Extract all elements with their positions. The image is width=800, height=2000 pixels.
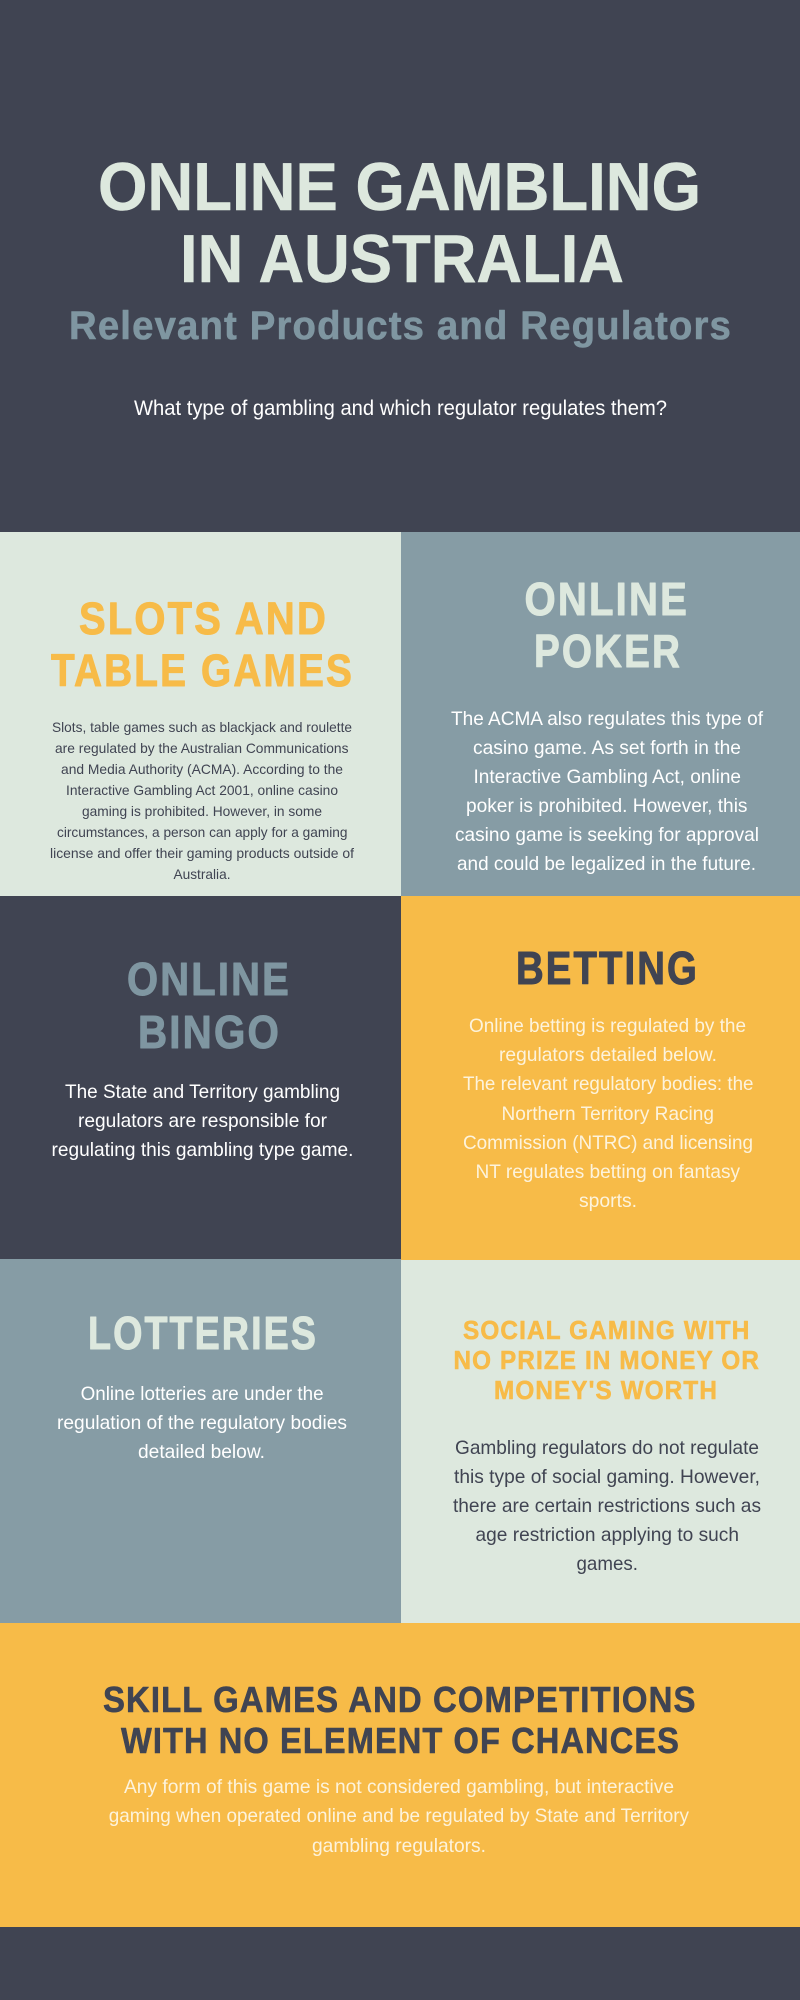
intro question: What type of gambling and which regulator regulates them? (134, 397, 667, 420)
title: IN AUSTRALIA (180, 221, 624, 297)
title: ONLINE GAMBLING (98, 149, 701, 225)
panel: skill games (0, 1623, 800, 1927)
text: slots and table games description (50, 719, 354, 882)
heading: social gaming: MONEY'S WORTH (494, 1377, 718, 1405)
panel: online poker (401, 532, 800, 896)
panel: header (0, 0, 800, 532)
text: slots and table games description: license and offer their gaming products outside of (50, 845, 354, 861)
text: social gaming description: this type of social gaming. However, (454, 1466, 760, 1488)
text: social gaming description: games. (576, 1553, 638, 1575)
text: betting description: Commission (NTRC) and licensing (463, 1132, 753, 1154)
heading: online poker: ONLINE (524, 573, 689, 625)
heading: slots and table games: SLOTS AND (79, 593, 328, 644)
text: betting description (463, 1015, 754, 1212)
text: betting description: regulators detailed below. (499, 1044, 717, 1066)
panel: lotteries (0, 1259, 401, 1623)
heading: online bingo (127, 953, 291, 1058)
text: online bingo description: regulating this gambling type game. (52, 1139, 354, 1161)
text: skill games description: Any form of this game is not considered gambling, but interactive (124, 1776, 674, 1798)
text: lotteries description (57, 1383, 347, 1463)
text: online poker description: casino game. As set forth in the (473, 737, 741, 759)
text: social gaming description: Gambling regulators do not regulate (455, 1437, 759, 1459)
heading: skill games (103, 1679, 696, 1761)
heading: online poker: POKER (534, 625, 682, 677)
heading: skill games: SKILL GAMES AND COMPETITIONS (103, 1679, 696, 1720)
text: social gaming description: there are certain restrictions such as (453, 1495, 761, 1517)
heading: betting: BETTING (516, 942, 699, 994)
text: online bingo description: The State and Territory gambling (65, 1081, 340, 1103)
text: skill games description: gaming when operated online and be regulated by State and Territory (109, 1805, 689, 1827)
text: social gaming description: age restriction applying to such (476, 1524, 739, 1546)
heading: slots and table games (51, 593, 354, 696)
text: slots and table games description: and Media Authority (ACMA). According to the (61, 761, 343, 777)
footer band (0, 1927, 800, 2000)
panel: slots and table games (0, 532, 401, 896)
panel: betting (401, 896, 800, 1260)
subtitle: Relevant Products and Regulators (69, 304, 732, 348)
text: slots and table games description: Australia. (174, 866, 230, 882)
heading: online poker (524, 573, 689, 677)
text: slots and table games description: Slots, table games such as blackjack and roulette (52, 719, 352, 735)
panel: social gaming (401, 1260, 800, 1623)
text: lotteries description: regulation of the regulatory bodies (57, 1412, 347, 1434)
text: social gaming description (453, 1437, 761, 1575)
heading: online bingo: BINGO (138, 1006, 281, 1058)
text: online bingo description: regulators are responsible for (78, 1110, 327, 1132)
text: betting description: sports. (579, 1190, 637, 1212)
text: betting description: NT regulates betting on fantasy (476, 1161, 740, 1183)
text: lotteries description: detailed below. (138, 1441, 265, 1463)
text: slots and table games description: are regulated by the Australian Communications (55, 740, 348, 756)
text: betting description: The relevant regulatory bodies: the (463, 1073, 754, 1095)
text: lotteries description: Online lotteries are under the (81, 1383, 324, 1405)
text: slots and table games description: Interactive Gambling Act 2001, online casino (66, 782, 338, 798)
heading: slots and table games: TABLE GAMES (51, 645, 354, 696)
text: online poker description: poker is prohibited. However, this (466, 795, 748, 817)
heading: social gaming: SOCIAL GAMING WITH (463, 1317, 750, 1345)
heading: social gaming: NO PRIZE IN MONEY OR (454, 1347, 760, 1375)
text: online poker description: The ACMA also regulates this type of (451, 708, 764, 730)
text: skill games description (109, 1776, 689, 1857)
heading: skill games: WITH NO ELEMENT OF CHANCES (121, 1720, 680, 1761)
heading: social gaming (454, 1317, 760, 1405)
text: skill games description: gambling regulators. (312, 1835, 486, 1857)
heading: online bingo: ONLINE (127, 953, 291, 1005)
title (98, 149, 701, 297)
text: betting description: Northern Territory Racing (502, 1103, 714, 1125)
text: online poker description: casino game is seeking for approval (455, 824, 759, 846)
heading: lotteries: LOTTERIES (88, 1307, 318, 1359)
text: slots and table games description: circumstances, a person can apply for a gaming (57, 824, 348, 840)
text: online poker description: Interactive Gambling Act, online (474, 766, 741, 788)
text: online poker description (451, 708, 764, 875)
text: online poker description: and could be legalized in the future. (457, 853, 756, 875)
text: betting description: Online betting is regulated by the (469, 1015, 746, 1037)
text: slots and table games description: gaming is prohibited. However, in some (82, 803, 322, 819)
text: online bingo description (52, 1081, 354, 1161)
panel: online bingo (0, 896, 401, 1259)
